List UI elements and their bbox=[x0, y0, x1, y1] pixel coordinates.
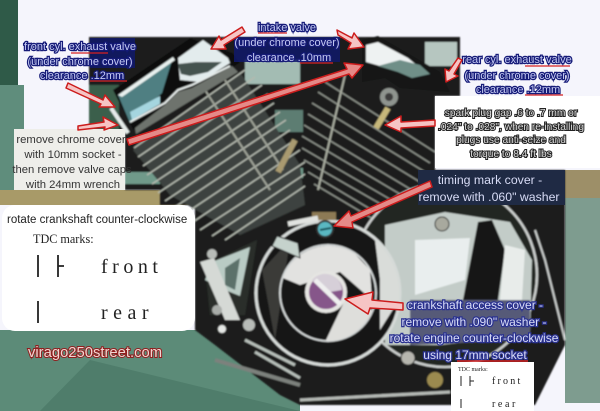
panel: TDC marks: TDC marks: bbox=[33, 232, 94, 246]
rear chrome valve cover bbox=[362, 36, 450, 128]
intake valve label bbox=[234, 22, 340, 64]
panel: TDC marks: rotate crankshaft counter-clockwise bbox=[7, 214, 187, 226]
arrow: to intake left bbox=[211, 27, 245, 49]
panel: spark plug note bbox=[435, 96, 600, 168]
front cylinder fins bbox=[133, 70, 305, 240]
panel: small TDC marks: TDC marks: bbox=[458, 367, 488, 373]
panel: timing mark note: timing mark cover - bbox=[438, 173, 542, 187]
panel: timing mark note bbox=[418, 170, 565, 205]
front exhaust valve label: clearance .12mm bbox=[40, 70, 124, 82]
crankcase left cover bbox=[200, 240, 300, 378]
crankshaft access label: crankshaft access cover - bbox=[407, 298, 543, 312]
intake valve label: intake valve bbox=[258, 22, 316, 34]
engine dark backdrop bbox=[89, 37, 565, 405]
rear exhaust valve label: clearance .12mm bbox=[476, 84, 560, 96]
crankshaft access label: using 17mm socket bbox=[423, 348, 527, 362]
front exhaust valve label: (under chrome cover) bbox=[27, 56, 133, 68]
panel: remove chrome cover note: then remove valve caps bbox=[12, 164, 132, 176]
panel: remove chrome cover note bbox=[12, 129, 132, 191]
crankshaft access label bbox=[390, 298, 559, 362]
arrow: rear exhaust bbox=[445, 58, 462, 82]
website label: virago250street.com bbox=[28, 345, 162, 361]
arrows bbox=[66, 27, 462, 314]
clutch cover right bbox=[215, 183, 565, 400]
arrow: front exhaust bbox=[66, 83, 115, 107]
crankshaft access label: remove with .090" washer - bbox=[402, 315, 546, 329]
arrow: crank bbox=[345, 292, 403, 314]
panel: spark plug note: plugs use anti-seize and bbox=[456, 135, 566, 146]
arrow: spark plug bbox=[385, 116, 435, 132]
rear cylinder fins bbox=[302, 75, 435, 226]
panel: small TDC marks: front bbox=[492, 376, 522, 387]
panel: TDC marks: front bbox=[101, 256, 162, 278]
engine photo bbox=[89, 36, 565, 405]
rear exhaust valve label bbox=[462, 54, 572, 96]
arrow: timing mark bbox=[334, 181, 432, 228]
intake valve label: clearance .10mm bbox=[247, 52, 331, 64]
arrow: front cover long line bbox=[127, 63, 363, 145]
front exhaust valve label bbox=[24, 38, 136, 82]
panel: small TDC marks: rear bbox=[492, 399, 518, 410]
panel: remove chrome cover note: with 24mm wrench bbox=[25, 179, 120, 191]
panel: TDC marks bbox=[2, 205, 195, 331]
panel: timing mark note: remove with .060" washer bbox=[418, 190, 560, 204]
panel: remove chrome cover note: remove chrome cover bbox=[16, 134, 126, 146]
spark plug front bbox=[278, 140, 295, 172]
front exhaust valve label: front cyl. exhaust valve bbox=[24, 41, 136, 53]
panel: spark plug note: torque to 8.4 ft lbs bbox=[470, 149, 552, 160]
front chrome valve cover bbox=[111, 38, 240, 134]
crankshaft access label: rotate engine counter-clockwise bbox=[390, 331, 559, 345]
panel: TDC marks: rear bbox=[101, 302, 154, 324]
intake valve label: (under chrome cover) bbox=[234, 37, 340, 49]
timing cover large dome bbox=[256, 212, 400, 365]
panel: small TDC marks bbox=[451, 362, 534, 411]
panel: spark plug note: spark plug gap .6 to .7 mm or bbox=[445, 108, 578, 119]
panel: spark plug note: .024" to .028", when re-installing bbox=[438, 122, 584, 133]
rear exhaust valve label: (under chrome cover) bbox=[464, 70, 570, 82]
arrow: chrome cover bbox=[78, 117, 118, 130]
rear exhaust valve label: rear cyl. exhaust valve bbox=[462, 54, 572, 66]
panel: remove chrome cover note: with 10mm socket - bbox=[23, 149, 122, 161]
arrow: to intake right bbox=[337, 30, 364, 49]
